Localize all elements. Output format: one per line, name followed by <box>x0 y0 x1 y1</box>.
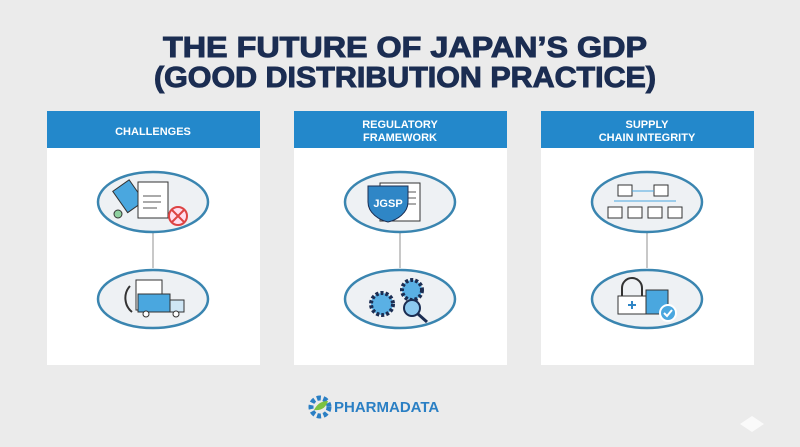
icon: delivery truck cycle <box>98 270 208 328</box>
panel: supply chain integrity <box>541 111 754 365</box>
icon: gears and magnifier <box>345 270 455 328</box>
decorative sparkle <box>740 416 764 432</box>
heading: supply chain integrity: SUPPLY <box>625 119 669 131</box>
icon: broken vial and rejected document <box>98 172 208 232</box>
heading: regulatory framework: FRAMEWORK <box>363 132 437 144</box>
heading: supply chain integrity: CHAIN INTEGRITY <box>599 132 696 144</box>
heading: regulatory framework: REGULATORY <box>362 119 438 131</box>
icon: JGSP shield: JGSP <box>373 198 403 210</box>
icon: JGSP shield <box>345 172 455 232</box>
icon: secure lock and check <box>592 270 702 328</box>
heading: challenges: CHALLENGES <box>115 126 191 138</box>
title <box>154 32 656 94</box>
logo: pharmadata: PHARMADATA <box>334 399 439 416</box>
panel: regulatory framework <box>294 111 507 365</box>
title: (GOOD DISTRIBUTION PRACTICE) <box>154 62 656 94</box>
title: THE FUTURE OF JAPAN’S GDP <box>163 32 647 64</box>
icon: connected boxes <box>592 172 702 232</box>
panel: challenges <box>47 111 260 365</box>
